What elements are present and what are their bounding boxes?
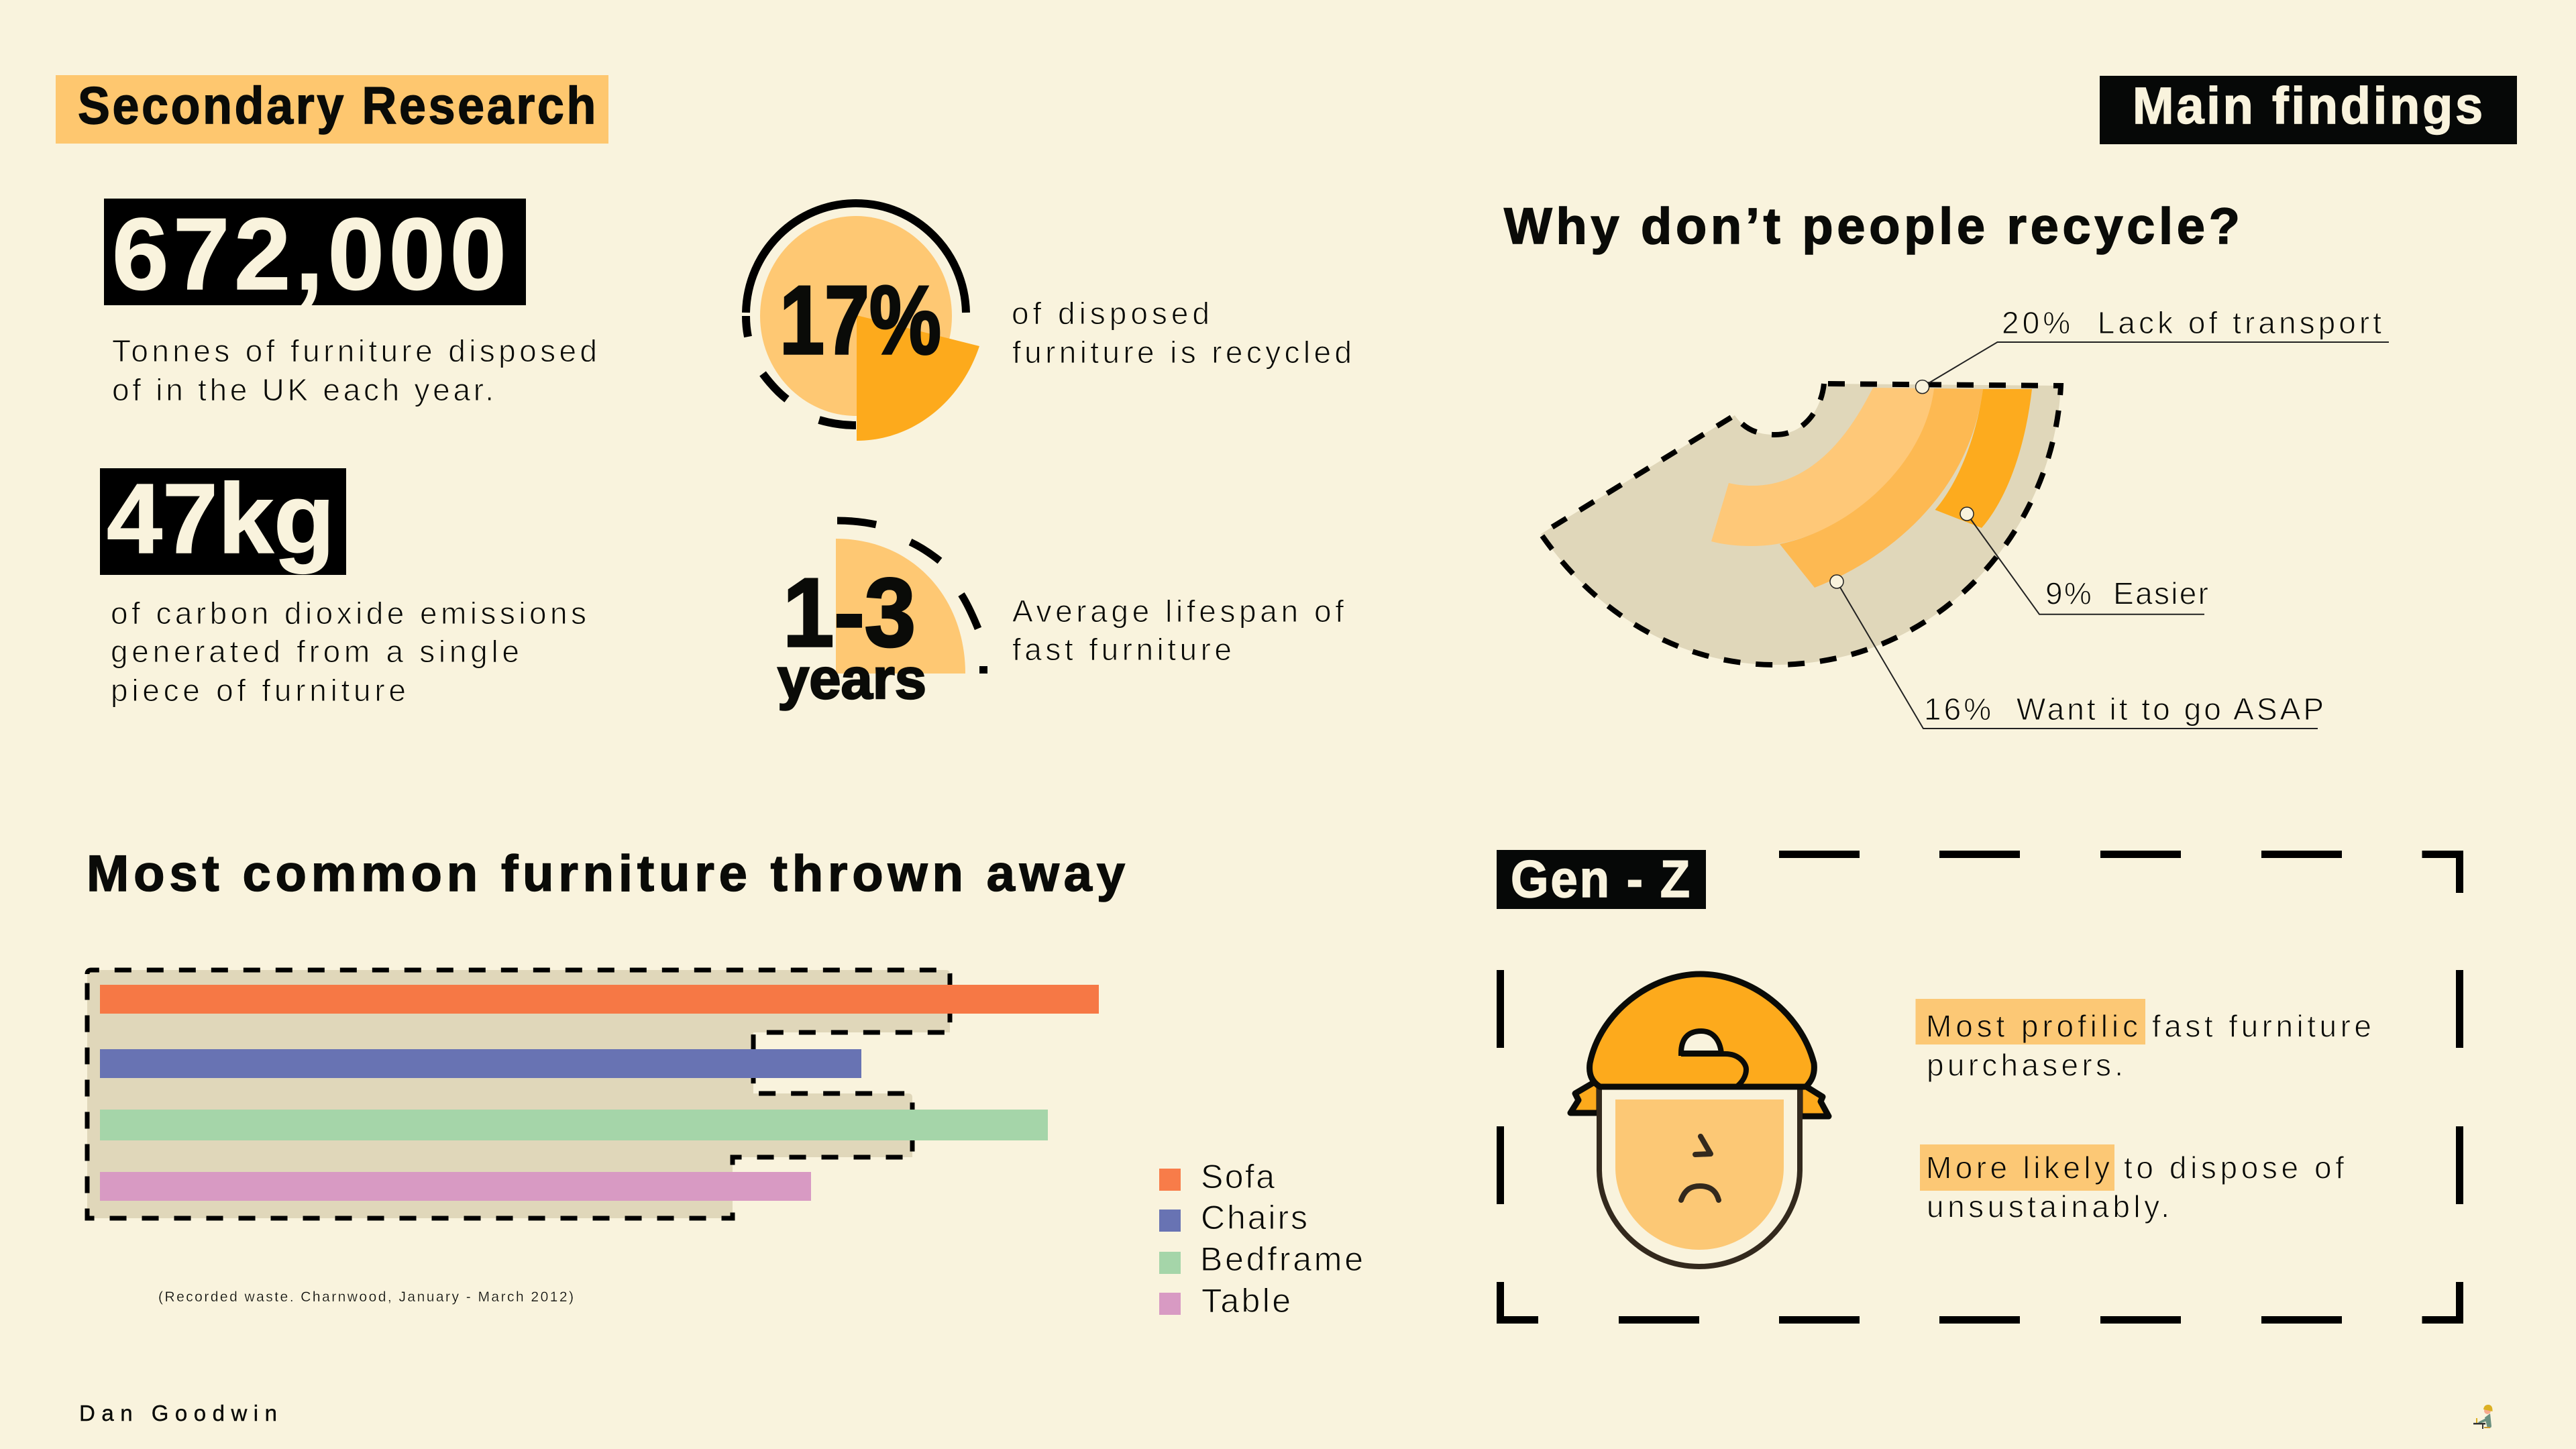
cap knob	[1681, 1031, 1721, 1053]
text: of disposed furniture is recycled: of disposed	[1012, 296, 1210, 331]
panel: Gen-Z dashed frame	[1497, 851, 2463, 1324]
stat description: carbon dioxide: of carbon dioxide emissions	[111, 596, 586, 631]
hair right	[1800, 1085, 1829, 1116]
icon: person at desk	[2473, 1405, 2493, 1429]
stat description: carbon dioxide: generated from a single	[111, 634, 519, 669]
chart legend: Bedframe	[1200, 1240, 1363, 1278]
chart legend	[1159, 1158, 1363, 1320]
stat description: tonnes	[112, 333, 597, 407]
pie chart: reasons for not recycling	[1541, 384, 2061, 665]
pie chart: 17% recycled: 17%	[780, 266, 941, 374]
heading: Gen - Z: Gen - Z	[1511, 849, 1692, 908]
bar: sofa	[100, 985, 1099, 1014]
bar: chairs	[100, 1049, 861, 1078]
text: more likely: unsustainably.	[1927, 1189, 2169, 1224]
callout: 20% lack of transport	[1916, 305, 2389, 394]
eye	[1695, 1136, 1711, 1155]
bar: bedframe	[100, 1110, 1048, 1140]
text: average lifespan: Average lifespan of	[1012, 594, 1344, 629]
text: most profilic: Most profilic	[1926, 1008, 2138, 1043]
band: 20% lack of transport	[1711, 388, 1934, 546]
pie chart: 1-3 years: years	[777, 647, 926, 711]
stat description: tonnes: of in the UK each year.	[112, 372, 494, 407]
callout: 16% want it to go ASAP	[1830, 575, 2324, 729]
pie background	[1541, 384, 2061, 665]
pie chart: 1-3 years	[777, 521, 987, 711]
text: more likely: More likely	[1926, 1150, 2110, 1185]
stat: 47kg: 47kg	[107, 464, 335, 574]
stat description: carbon dioxide	[111, 596, 586, 708]
stat description: tonnes: Tonnes of furniture disposed	[112, 333, 597, 368]
chart source note: (Recorded waste. Charnwood, January - March 2012)	[158, 1289, 574, 1305]
text: of disposed furniture is recycled	[1012, 296, 1352, 370]
hair left	[1570, 1082, 1599, 1113]
text: most profilic: fast furniture	[2152, 1008, 2371, 1043]
mouth	[1681, 1186, 1719, 1200]
callout: 9% easier	[1960, 507, 2208, 614]
text: more likely	[1920, 1144, 2344, 1224]
bar chart: furniture thrown away	[87, 970, 1099, 1218]
callout: 20% lack of transport: 20% Lack of transport	[2002, 305, 2381, 340]
pie chart: 1-3 years: 1-3	[783, 558, 916, 667]
stat: 672,000 tonnes: 672,000	[112, 197, 506, 311]
text: most profilic: purchasers.	[1927, 1048, 2123, 1083]
stat: 47kg	[100, 464, 586, 708]
chart legend: Sofa	[1201, 1158, 1275, 1195]
heading: Why don't people recycle?: Why don’t people recycle?	[1504, 198, 2240, 255]
stat: 672,000 tonnes	[104, 197, 597, 407]
callout: 9% easier: 9% Easier	[2045, 576, 2208, 610]
text: of disposed furniture is recycled: furniture is recycled	[1012, 335, 1352, 370]
chart legend: Table	[1201, 1282, 1291, 1320]
footer: author: Dan Goodwin	[79, 1401, 277, 1426]
stat description: carbon dioxide: piece of furniture	[111, 673, 406, 708]
band: 16% want it to go ASAP	[1780, 388, 1983, 588]
heading: Most common furniture thrown away: Most common furniture thrown away	[87, 845, 1125, 902]
heading: Secondary Research: Secondary Research	[78, 76, 598, 135]
text: more likely: to dispose of	[2124, 1150, 2344, 1185]
text: average lifespan: fast furniture	[1012, 632, 1232, 667]
text: average lifespan	[1012, 594, 1344, 667]
heading: Main findings: Main findings	[2133, 77, 2485, 135]
callout: 16% want it to go ASAP: 16% Want it to go ASAP	[1924, 692, 2324, 727]
pie chart: 17% recycled	[746, 203, 979, 441]
icon: sad person with cap	[1570, 974, 1829, 1267]
band: 9% easier	[1935, 389, 2032, 528]
dashed ring	[837, 521, 978, 629]
text: most profilic	[1916, 999, 2371, 1083]
face	[1599, 1087, 1800, 1267]
bar: table	[100, 1172, 811, 1201]
chart legend: Chairs	[1201, 1199, 1307, 1236]
cap	[1590, 974, 1814, 1087]
dashed ring	[746, 203, 966, 425]
